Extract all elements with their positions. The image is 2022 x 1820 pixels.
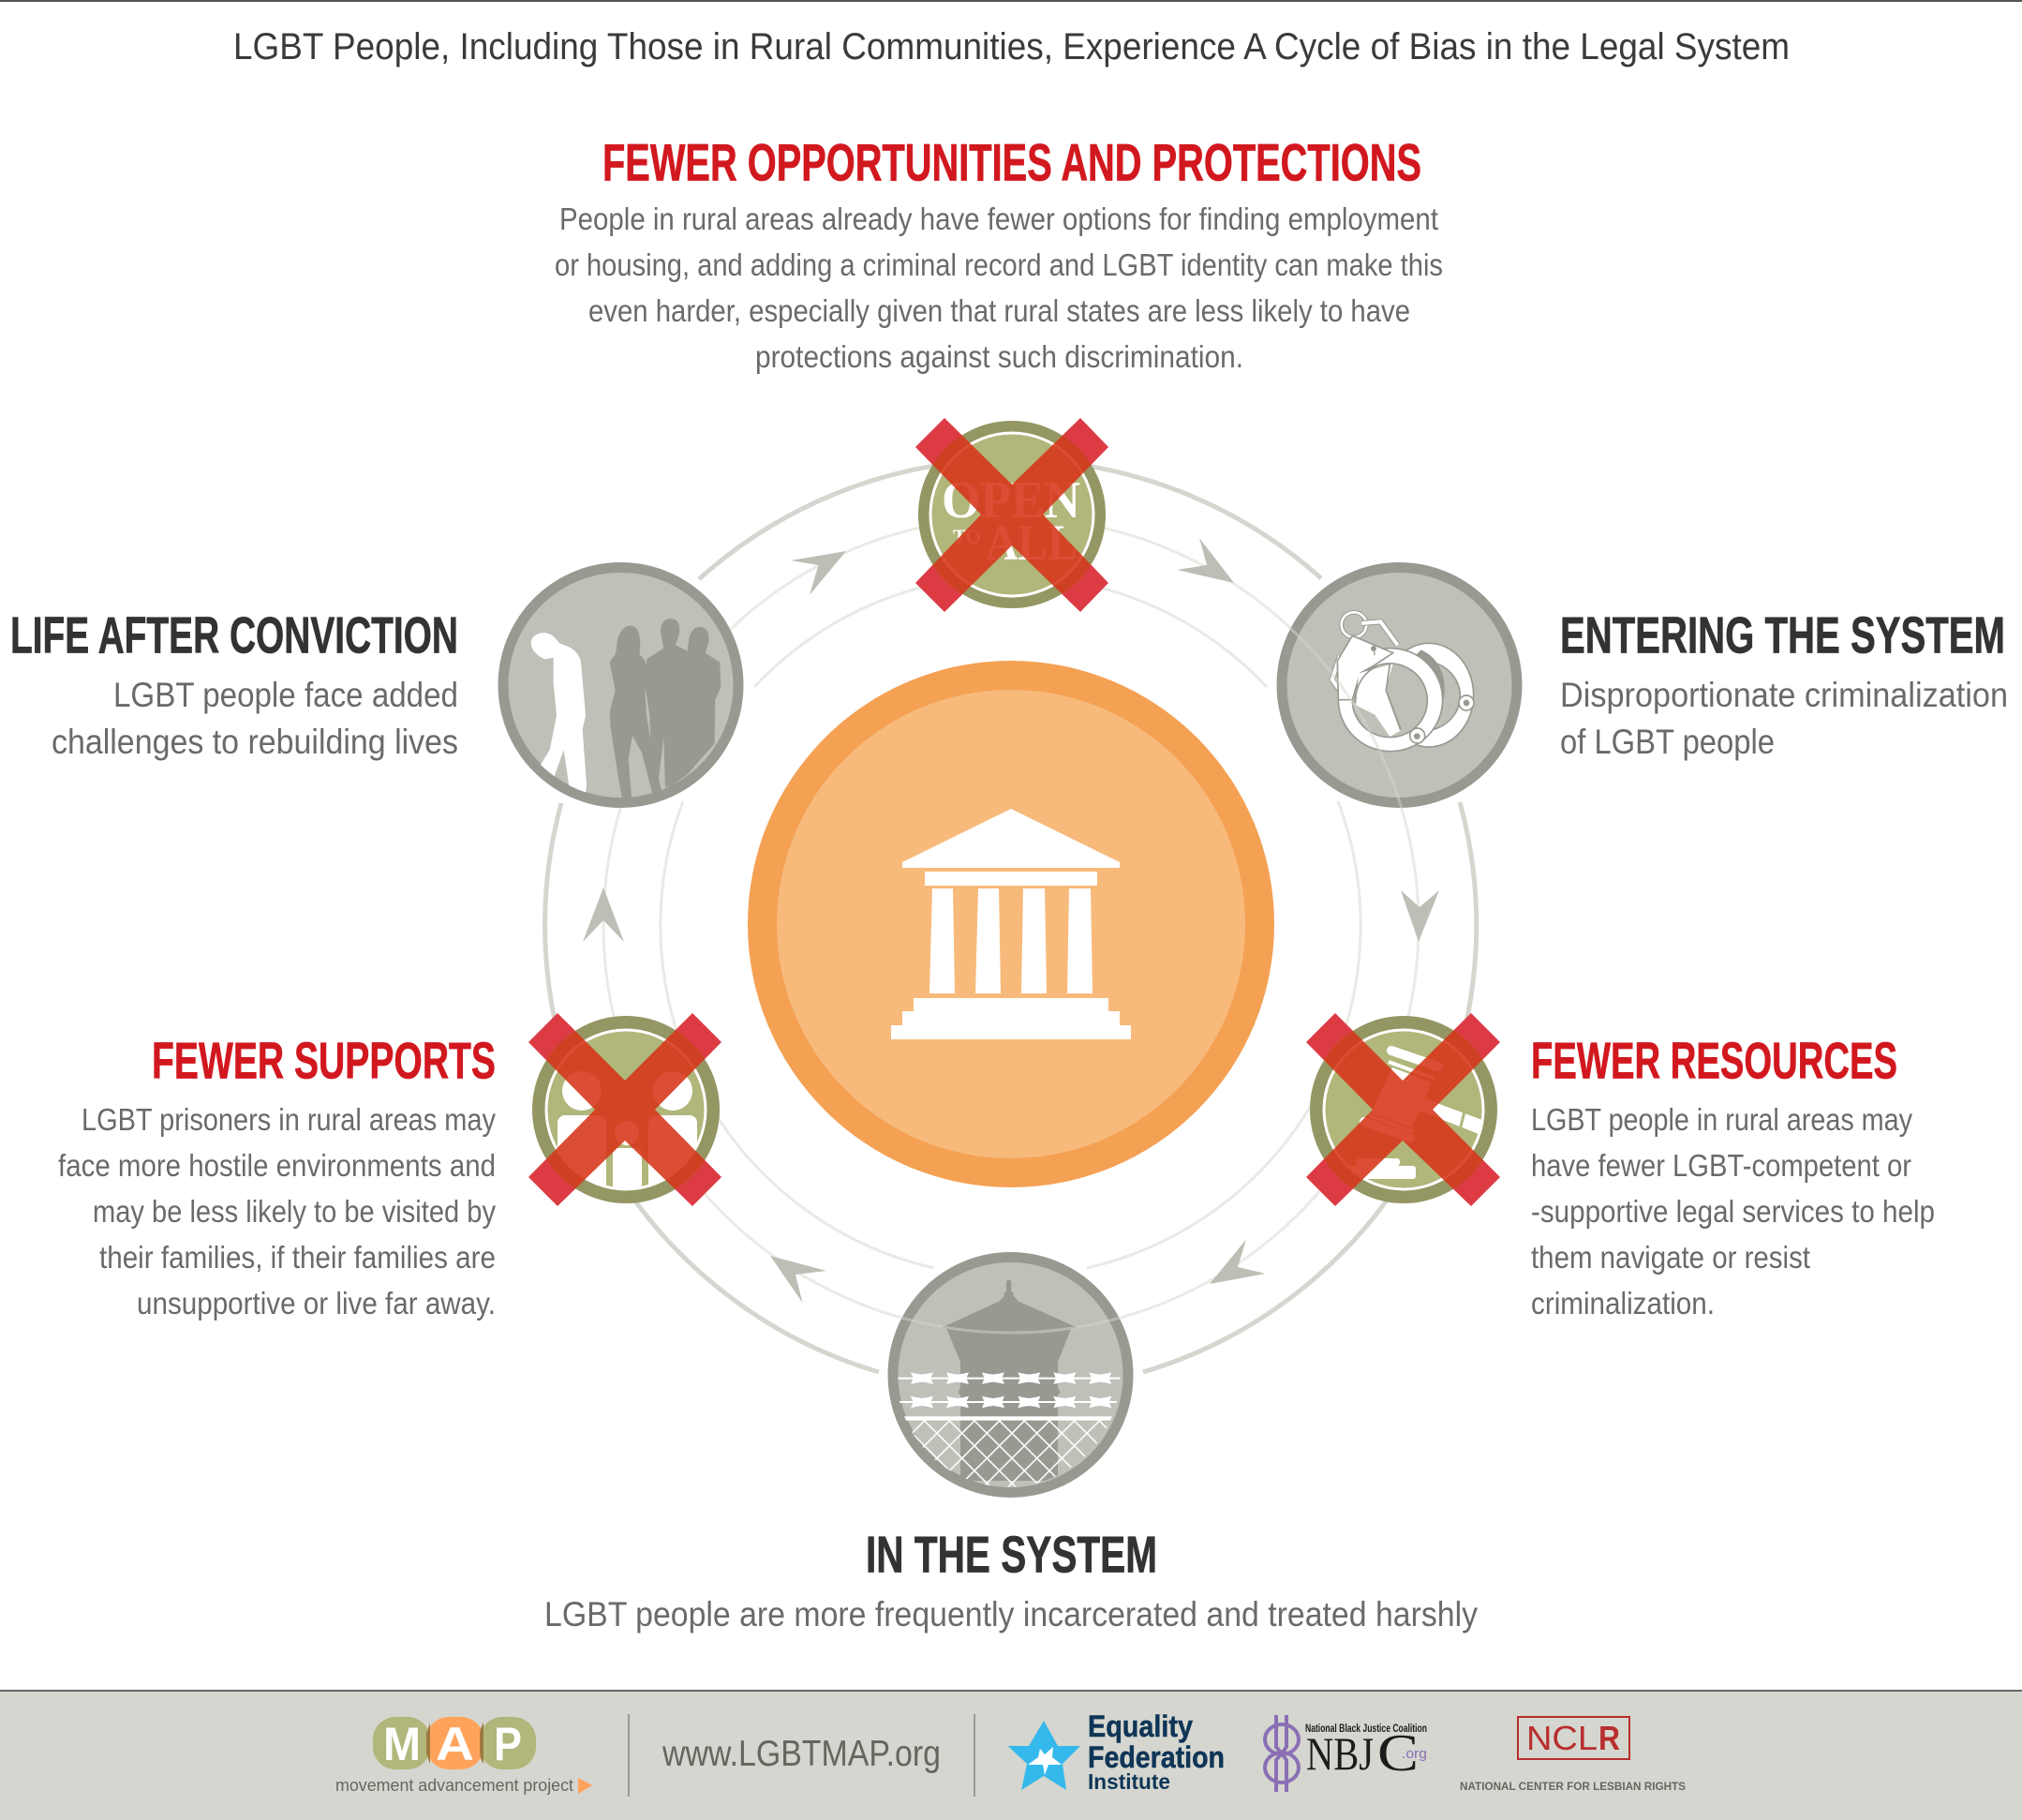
logo: movement advancement project: M: [383, 1718, 421, 1770]
text block: fewer opportunities: even harder, especially given that rural states are less likely to have: [588, 294, 1410, 329]
arrow: supports to life after conviction: [583, 888, 624, 942]
text block: life after conviction: LGBT people face added: [113, 675, 458, 714]
red X over disc: [1324, 1031, 1482, 1189]
panel: fewer resources text: [1531, 1031, 1935, 1321]
logo: national black justice coalition: C: [1377, 1724, 1419, 1783]
family disc: [532, 1016, 720, 1203]
central courthouse disc: [748, 661, 1274, 1187]
icon: handcuffs (entering the system): [1282, 568, 1517, 802]
logo: movement advancement project: [335, 1717, 592, 1795]
top rule: [0, 0, 2022, 2]
red X outer tips: [1306, 1013, 1500, 1206]
text block: fewer supports: LGBT prisoners in rural areas may: [82, 1103, 496, 1138]
logo: movement advancement project: P: [494, 1718, 522, 1770]
footer band: [0, 1690, 2022, 1820]
logo: equality federation institute: Institute: [1088, 1769, 1170, 1794]
logo: equality federation institute: Federation: [1088, 1740, 1225, 1774]
arrow: opportunities to entering the system: [1177, 538, 1234, 583]
text block: entering the system: of LGBT people: [1560, 722, 1775, 761]
icon: courthouse: [891, 809, 1131, 1039]
text block: fewer supports: unsupportive or live far away.: [137, 1287, 496, 1321]
text block: fewer resources: LGBT people in rural areas may: [1531, 1103, 1912, 1138]
text block: fewer resources: -supportive legal services to help: [1531, 1195, 1935, 1230]
text block: fewer opportunities: or housing, and adding a criminal record and LGBT identity can make this: [555, 248, 1443, 283]
text block: life after conviction: challenges to rebuilding lives: [52, 722, 458, 761]
red X over disc: [546, 1030, 705, 1189]
arrow: resources to in the system: [1210, 1239, 1266, 1284]
logo: equality federation institute: Equality: [1088, 1709, 1193, 1743]
logo: movement advancement project: movement advancement project: [335, 1776, 573, 1795]
panel: entering the system text: [1560, 605, 2008, 761]
arrow: life after conviction to opportunities: [791, 551, 846, 595]
footer url: www.LGBTMAP.org: [662, 1734, 941, 1774]
text block: fewer resources: [1531, 1103, 1935, 1321]
text block: fewer resources: them navigate or resist: [1531, 1241, 1811, 1275]
logo: national black justice coalition: NBJ: [1306, 1727, 1374, 1780]
panel: fewer opportunities and protections text: [555, 133, 1443, 375]
inner cycle ring: [661, 576, 1360, 1268]
middle cycle ring with arrows: [603, 517, 1419, 1333]
icon: open to all sign with red X (fewer opportunities): [915, 418, 1108, 612]
text block: fewer opportunities: protections against such discrimination.: [755, 340, 1243, 375]
panel: life after conviction text: [10, 605, 458, 761]
outer cycle ring: [545, 459, 1477, 1372]
logo: national black justice coalition: .org: [1402, 1746, 1427, 1762]
sign disc: TO: [953, 525, 981, 548]
red X outer tips: [528, 1013, 721, 1206]
heading: life after conviction: LIFE AFTER CONVICTION: [10, 605, 458, 664]
text block: fewer resources: criminalization.: [1531, 1287, 1715, 1321]
icon: prison tower with razor wire (in the system): [893, 1258, 1128, 1492]
panel: in the system text: [544, 1526, 1478, 1634]
text block: fewer supports: may be less likely to be visited by: [93, 1195, 496, 1230]
logo: national center for lesbian rights: R: [1598, 1719, 1620, 1757]
sign disc: [918, 421, 1106, 608]
arrow: entering the system to resources: [1401, 890, 1439, 942]
text block: life after conviction: [52, 675, 458, 761]
logo: national center for lesbian rights: [1460, 1717, 1686, 1793]
icon: gavel and books with red X (fewer resources): [1306, 1013, 1500, 1206]
heading: fewer supports: FEWER SUPPORTS: [152, 1031, 496, 1089]
red X outer tips: [915, 418, 1108, 612]
logo: national center for lesbian rights: NCL: [1526, 1719, 1598, 1757]
logo: national center for lesbian rights: NATIONAL CENTER FOR LESBIAN RIGHTS: [1460, 1780, 1686, 1793]
panel: fewer supports text: [58, 1031, 496, 1321]
text block: fewer supports: their families, if their families are: [99, 1241, 496, 1275]
icon: family with red X (fewer supports): [528, 1013, 721, 1206]
text block: fewer supports: face more hostile environments and: [58, 1149, 496, 1184]
text block: fewer supports: [58, 1103, 496, 1321]
arrow: in the system to supports: [770, 1256, 826, 1303]
text block: fewer resources: have fewer LGBT-competent or: [1531, 1149, 1911, 1184]
logo: national black justice coalition: [1265, 1715, 1427, 1792]
logo: national black justice coalition: National Black Justice Coalition: [1305, 1722, 1427, 1735]
sign disc: OPEN: [942, 471, 1080, 530]
text block: in the system: LGBT people are more frequently incarcerated and treated harshly: [544, 1594, 1478, 1634]
text block: fewer opportunities: [555, 202, 1443, 375]
logo: equality federation institute: [1008, 1709, 1225, 1794]
icon: silhouettes (life after conviction): [503, 568, 738, 802]
title: LGBT People, Including Those in Rural Communities, Experience A Cycle of Bias in the Legal System: [233, 26, 1790, 67]
logo: movement advancement project: A: [436, 1718, 474, 1770]
heading: in the system: IN THE SYSTEM: [866, 1526, 1157, 1584]
heading: fewer opportunities: FEWER OPPORTUNITIES AND PROTECTIONS: [602, 133, 1421, 191]
red X over disc: [933, 435, 1091, 594]
gavel disc: [1310, 1016, 1497, 1203]
text block: fewer opportunities: People in rural areas already have fewer options for finding employment: [559, 202, 1439, 237]
text block: entering the system: [1560, 675, 2008, 761]
sign disc: ALL: [986, 515, 1078, 571]
